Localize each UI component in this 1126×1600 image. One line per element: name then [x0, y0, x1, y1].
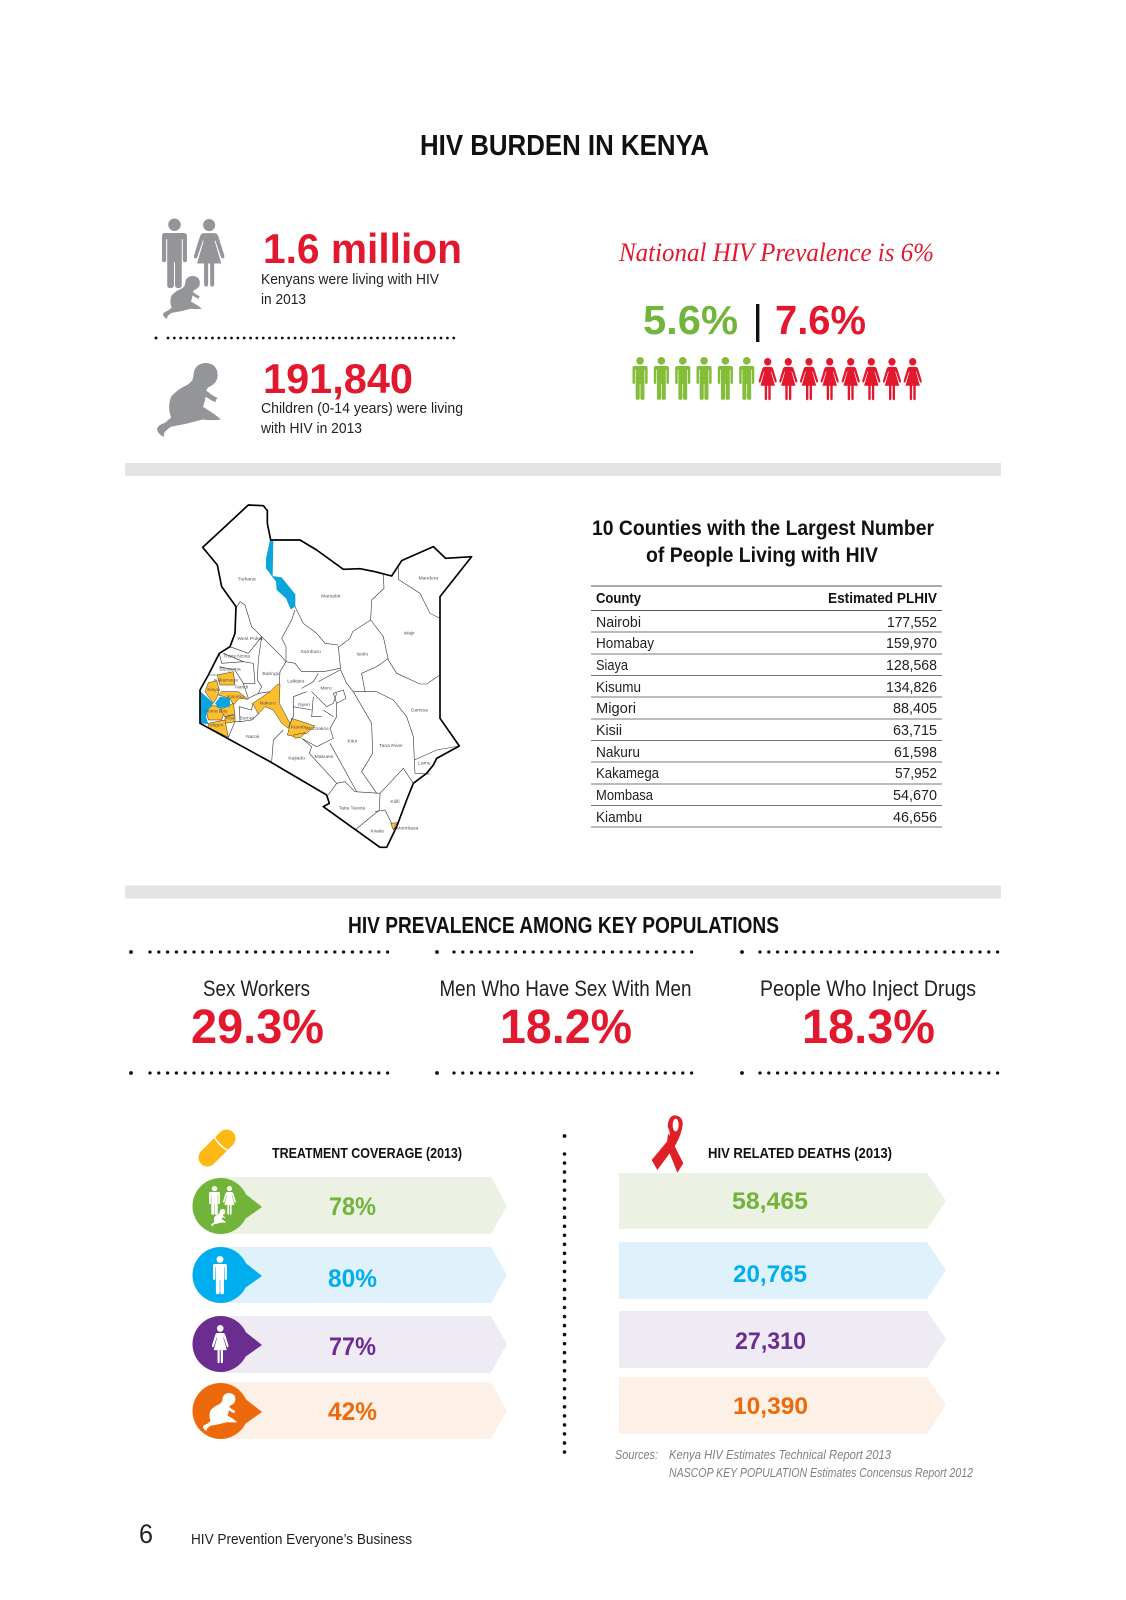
table: estimated PLHIV values: 177,552: [887, 614, 937, 631]
map: county names: Mandera: [418, 575, 438, 581]
map: county names: Isiolo: [357, 652, 368, 658]
map: county names: Garissa: [411, 708, 428, 714]
footer: 6: [139, 1519, 153, 1549]
icon row: women: [759, 358, 922, 400]
icon row: men: [632, 357, 754, 400]
map: county names: Narok: [246, 734, 260, 740]
heading: table title: 10 Counties with the Largest Number: [592, 517, 934, 540]
heading: deaths: HIV RELATED DEATHS (2013): [708, 1145, 892, 1162]
bar: deaths 27,310: [619, 1311, 946, 1368]
sources: NASCOP KEY POPULATION Estimates Concensus Report 2012: [669, 1465, 974, 1480]
panel: treatment coverage: [192, 1125, 507, 1439]
text: Kenyans living with HIV: Kenyans were living with HIV: [261, 271, 439, 288]
panel: top 10 counties table: [591, 517, 942, 827]
map: county names: Kitui: [347, 739, 357, 745]
icon: baby: [157, 363, 221, 437]
table rules: [591, 586, 942, 827]
stat: sex workers: [191, 976, 324, 1054]
bar: deaths 58,465: [619, 1173, 946, 1229]
table: estimated PLHIV values: 46,656: [893, 809, 937, 826]
bar: deaths 20,765: 20,765: [733, 1261, 807, 1288]
table: county names: Kiambu: [596, 809, 642, 826]
map: county names: Migori: [210, 722, 223, 728]
map: county names: [204, 575, 438, 835]
footer: HIV Prevention Everyone’s Business: [191, 1531, 412, 1548]
table: estimated PLHIV values: 88,405: [893, 700, 937, 717]
table: estimated PLHIV values: 61,598: [894, 744, 937, 761]
table: county names: Kisumu: [596, 679, 641, 696]
map: county names: Bungoma: [219, 666, 241, 672]
map: county names: Siaya: [207, 687, 220, 693]
bar: men 80%: 80%: [328, 1265, 377, 1293]
map: county names: Turkana: [238, 577, 256, 583]
heading: table title: [592, 517, 934, 567]
map: county names: Nyeri: [298, 702, 310, 708]
map: county names: Machakos: [306, 726, 329, 732]
map: county names: Kajiado: [288, 755, 305, 761]
table: estimated PLHIV values: 54,670: [893, 787, 937, 804]
map: county names: Taita Taveta: [339, 806, 365, 812]
text: children living with HIV: [260, 400, 463, 437]
table header: County: [596, 590, 642, 607]
table: county names: Kisii: [596, 722, 622, 739]
sources: Kenya HIV Estimates Technical Report 2013: [669, 1447, 892, 1462]
stat: men who have sex with men: [440, 976, 692, 1054]
map: lakes: [200, 540, 295, 724]
text: Kenyans living with HIV: [261, 271, 439, 308]
stat: sex workers: Sex Workers: [203, 976, 310, 1001]
map: county names: Kilifi: [390, 799, 400, 805]
map: county names: Trans Nzoia: [223, 654, 250, 660]
map: county names: Lamu: [418, 760, 431, 766]
map: county names: Kisumu: [227, 694, 244, 700]
panel: people living with HIV: [154, 218, 463, 437]
bar: all people 78%: 78%: [329, 1193, 376, 1221]
bar: children 42%: [192, 1382, 507, 1439]
map: county names: Homa Bay: [204, 708, 228, 714]
text: children living with HIV: with HIV in 2013: [260, 420, 362, 437]
panel: national prevalence: [618, 238, 934, 400]
table: estimated PLHIV values: 128,568: [886, 657, 937, 674]
table: county names: Siaya: [596, 657, 629, 674]
sources: Sources:: [615, 1447, 658, 1462]
bar: women 77%: 77%: [329, 1333, 376, 1361]
table: county names: Migori: [596, 700, 636, 717]
stat: people who inject drugs: People Who Inject Drugs: [760, 976, 976, 1001]
table header: [596, 590, 937, 607]
map: county names: Wajir: [404, 630, 415, 636]
heading: national prevalence: National HIV Prevalence is 6%: [618, 238, 934, 267]
stat: male prevalence: 5.6%: [643, 297, 738, 343]
map: county names: Tana River: [379, 743, 403, 749]
stat: men who have sex with men: 18.2%: [500, 1001, 632, 1054]
panel: HIV related deaths: [615, 1115, 974, 1480]
map: county names: Makueni: [315, 754, 333, 760]
heading: key populations: HIV PREVALENCE AMONG KEY POPULATIONS: [348, 912, 779, 938]
heading: treatment coverage: TREATMENT COVERAGE (2013): [272, 1145, 462, 1162]
map: county names: Mombasa: [396, 825, 418, 831]
stat: people who inject drugs: 18.3%: [802, 1001, 935, 1054]
map: county names: West Pokot: [237, 636, 263, 642]
bar: deaths 10,390: 10,390: [733, 1393, 808, 1420]
map: county borders: [208, 566, 459, 830]
icon: red ribbon: [652, 1115, 683, 1173]
table: estimated PLHIV values: [886, 614, 937, 826]
map: county names: Samburu: [301, 649, 321, 655]
stat: people who inject drugs: [760, 976, 976, 1054]
table: county names: Nakuru: [596, 744, 640, 761]
map: county names: Meru: [320, 685, 332, 691]
bar: children 42%: 42%: [328, 1398, 377, 1426]
table: county names: Mombasa: [596, 787, 654, 804]
map: county names: Laikipia: [287, 678, 304, 684]
map: county names: Kakamega: [214, 678, 238, 684]
table header: Estimated PLHIV: [828, 590, 937, 607]
table: estimated PLHIV values: 57,952: [895, 765, 937, 782]
bar: deaths 20,765: [619, 1242, 946, 1299]
bar: all people 78%: [192, 1177, 507, 1234]
bar: deaths 58,465: 58,465: [732, 1188, 808, 1215]
panel: key populations: [129, 912, 998, 1075]
bar: women 77%: [192, 1316, 507, 1373]
map: county names: Bomet: [239, 715, 254, 721]
stat: 1.6 million: 1.6 million: [263, 225, 462, 272]
map of Kenya: [200, 505, 472, 847]
footer: [139, 1519, 412, 1549]
table: county names: Homabay: [596, 635, 654, 652]
stat: female prevalence: 7.6%: [775, 297, 866, 343]
sources: [615, 1447, 974, 1480]
heading: table title: of People Living with HIV: [646, 544, 878, 567]
title: HIV BURDEN IN KENYA: [420, 130, 709, 162]
map: county names: Nandi: [235, 685, 248, 691]
icon: pill: [194, 1125, 240, 1171]
map: national outline: [200, 505, 472, 847]
table: county names: Kakamega: [596, 765, 660, 782]
bar: deaths 27,310: 27,310: [735, 1328, 806, 1355]
bar: men 80%: [192, 1247, 507, 1303]
vertical dotted divider: [563, 1134, 566, 1453]
bar: deaths 10,390: [619, 1377, 946, 1434]
map: county names: Kisii: [226, 716, 235, 722]
table: estimated PLHIV values: 134,826: [886, 679, 937, 696]
table: county names: [596, 614, 660, 826]
text: Kenyans living with HIV: in 2013: [261, 291, 306, 308]
map: highlighted counties: [205, 672, 397, 830]
table: estimated PLHIV values: 159,970: [886, 635, 937, 652]
map: county names: Baringo: [262, 671, 280, 677]
map: county names: Nakuru: [260, 700, 276, 706]
icon: man, woman and baby: [162, 218, 224, 319]
table: estimated PLHIV values: 63,715: [893, 722, 937, 739]
text: children living with HIV: Children (0-14 years) were living: [261, 400, 463, 417]
stat: 191,840: 191,840: [263, 355, 413, 402]
map: county names: Kwale: [371, 829, 384, 835]
stat: men who have sex with men: Men Who Have Sex With Men: [440, 976, 692, 1001]
map: county names: Marsabit: [321, 594, 341, 600]
table: county names: Nairobi: [596, 614, 641, 631]
stat: sex workers: 29.3%: [191, 1001, 324, 1054]
map: county names: Kiambu: [291, 725, 308, 731]
